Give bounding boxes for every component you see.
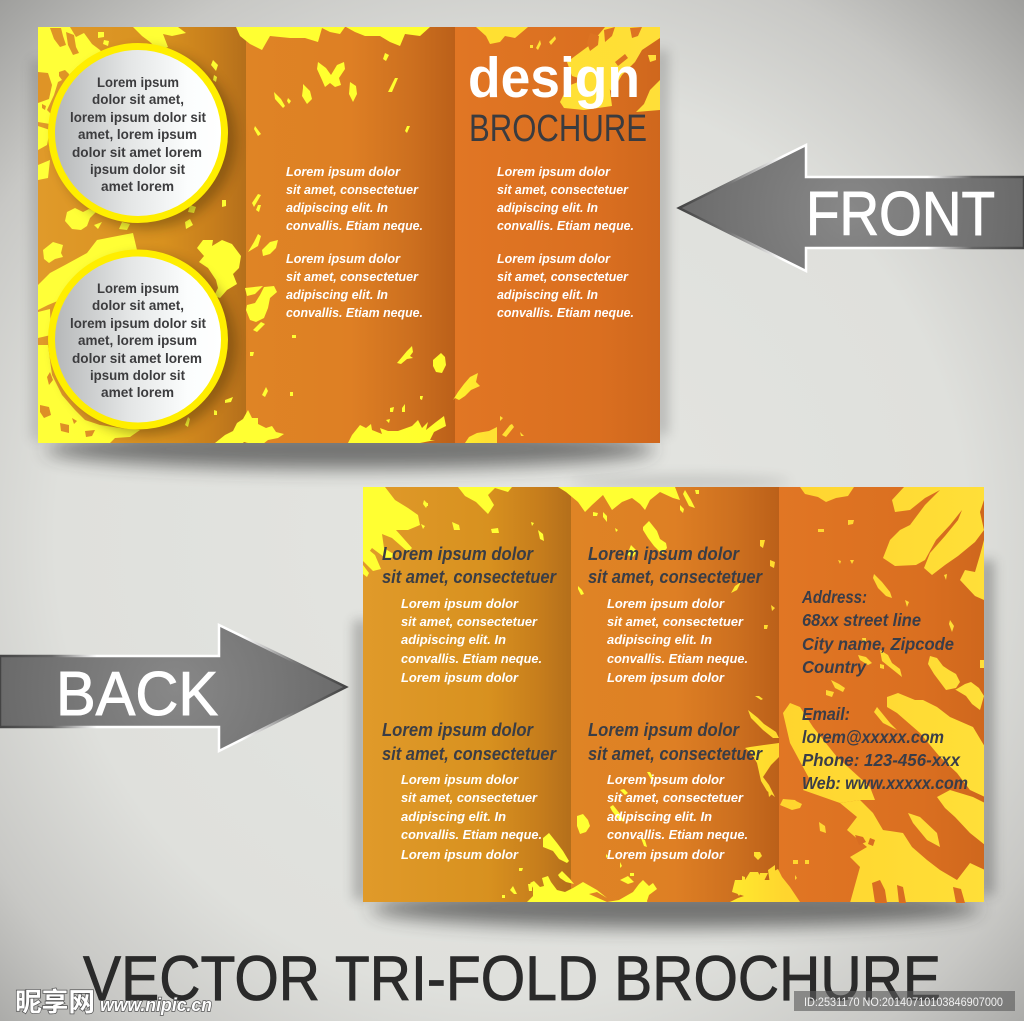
- front circle 1: Lorem ipsum: [97, 74, 179, 90]
- front paint splatter: [38, 27, 660, 444]
- back column 2 block 1: sit amet, consectetuer: [607, 614, 744, 629]
- back column 2 block 2: convallis. Etiam neque.: [607, 827, 748, 842]
- back brochure: [363, 487, 985, 913]
- watermark logo: 昵享网: [15, 987, 95, 1017]
- front brochure shadow: [32, 50, 668, 469]
- back brochure shadow: [354, 475, 994, 928]
- front cover heading: BROCHURE: [469, 108, 647, 150]
- back contact details: Country: [802, 657, 867, 677]
- watermark logo: www.nipic.cn: [100, 995, 212, 1015]
- front middle column text: convallis. Etiam neque.: [286, 218, 423, 233]
- back contact details: Phone: 123-456-xxx: [802, 750, 961, 770]
- front circle 1: ipsum dolor sit: [90, 161, 185, 177]
- back column 1 block 1: convallis. Etiam neque.: [401, 651, 542, 666]
- front circle 2: amet, lorem ipsum: [78, 332, 197, 348]
- back contact details: Address:: [801, 587, 867, 607]
- front circle 1: lorem ipsum dolor sit: [70, 109, 206, 125]
- back column 2 block 1: Lorem ipsum dolor: [607, 596, 725, 611]
- front right column text: convallis. Etiam neque.: [497, 218, 634, 233]
- back column 1 block 1: Lorem ipsum dolor: [401, 596, 519, 611]
- front cover heading: [468, 46, 647, 150]
- front cover heading: design: [468, 46, 640, 110]
- back column 2 block 2: Lorem ipsum dolor: [588, 720, 740, 740]
- back column 2 block 2: adipiscing elit. In: [607, 809, 712, 824]
- front arrow: FRONT: [806, 180, 995, 249]
- front right column text: sit amet, consectetuer: [497, 182, 629, 197]
- back column 2 block 1: [588, 544, 763, 685]
- main title: VECTOR TRI-FOLD BROCHURE: [83, 944, 941, 1014]
- front middle column text: adipiscing elit. In: [286, 287, 388, 302]
- watermark logo: [15, 987, 212, 1017]
- front circle 2: ipsum dolor sit: [90, 367, 185, 383]
- back contact details: [801, 587, 968, 793]
- back contact details: City name, Zipcode: [802, 634, 954, 654]
- front circle 1: amet, lorem ipsum: [78, 126, 197, 142]
- watermark id box: ID:2531170 NO:20140710103846907000: [804, 995, 1003, 1009]
- back column 1 block 2: sit amet, consectetuer: [401, 790, 538, 805]
- front middle column text: convallis. Etiam neque.: [286, 305, 423, 320]
- back arrow: [0, 625, 346, 751]
- back contact details: Email:: [802, 704, 850, 724]
- back column 1 block 1: Lorem ipsum dolor: [401, 670, 519, 685]
- back column 2 block 2: Lorem ipsum dolor: [607, 772, 725, 787]
- front circle 2: Lorem ipsum: [97, 280, 179, 296]
- back column 1 block 2: convallis. Etiam neque.: [401, 827, 542, 842]
- front circle 1: amet lorem: [101, 178, 174, 194]
- front circle 1: [48, 43, 236, 229]
- front middle column text: adipiscing elit. In: [286, 200, 388, 215]
- back contact details: Web: www.xxxxx.com: [802, 773, 968, 793]
- back column 2 block 2: sit amet, consectetuer: [588, 744, 763, 764]
- back column 1 block 2: sit amet, consectetuer: [382, 744, 557, 764]
- back column 1 block 2: Lorem ipsum dolor: [382, 720, 534, 740]
- back column 2 block 2: sit amet, consectetuer: [607, 790, 744, 805]
- back column 1 block 1: sit amet, consectetuer: [382, 567, 557, 587]
- front circle 1: dolor sit amet lorem: [72, 144, 202, 160]
- back column 2 block 1: Lorem ipsum dolor: [607, 670, 725, 685]
- front brochure: [38, 27, 660, 444]
- front circle 2: dolor sit amet lorem: [72, 350, 202, 366]
- front splatter holes: [38, 27, 642, 437]
- front right column text: adipiscing elit. In: [497, 200, 598, 215]
- back column 2 block 1: sit amet, consectetuer: [588, 567, 763, 587]
- back column 2 block 1: convallis. Etiam neque.: [607, 651, 748, 666]
- front middle column text: [286, 164, 423, 320]
- front circle 2: lorem ipsum dolor sit: [70, 315, 206, 331]
- front right column text: Lorem ipsum dolor: [497, 251, 611, 266]
- back column 1 block 2: adipiscing elit. In: [401, 809, 506, 824]
- back column 1 block 2: Lorem ipsum dolor: [401, 772, 519, 787]
- back column 1 block 1: Lorem ipsum dolor: [382, 544, 534, 564]
- back panels: [363, 487, 984, 902]
- front middle column text: Lorem ipsum dolor: [286, 164, 401, 179]
- front circle 2: dolor sit amet,: [92, 297, 184, 313]
- back column 2 block 2: [588, 720, 763, 862]
- back column 2 block 2: Lorem ipsum dolor: [607, 847, 725, 862]
- back column 1 block 1: sit amet, consectetuer: [401, 614, 538, 629]
- watermark id box: [794, 991, 1015, 1011]
- back contact details: 68xx street line: [802, 610, 921, 630]
- back column 2 block 1: adipiscing elit. In: [607, 632, 712, 647]
- front circle 2: amet lorem: [101, 384, 174, 400]
- back column 1 block 1: [382, 544, 557, 685]
- front right column text: convallis. Etiam neque.: [497, 305, 634, 320]
- front middle column text: sit amet, consectetuer: [286, 182, 419, 197]
- front circle 1: dolor sit amet,: [92, 91, 184, 107]
- front arrow: [679, 145, 1024, 271]
- front right column text: sit amet, consectetuer: [497, 269, 629, 284]
- front right column text: [497, 164, 634, 320]
- back contact details: lorem@xxxxx.com: [802, 727, 944, 747]
- back paint splatter: [363, 487, 985, 913]
- front panels: [38, 27, 660, 443]
- back arrow: BACK: [56, 660, 218, 729]
- back column 1 block 2: Lorem ipsum dolor: [401, 847, 519, 862]
- front circle 2: [48, 250, 236, 435]
- front right column text: adipiscing elit. In: [497, 287, 598, 302]
- front right column text: Lorem ipsum dolor: [497, 164, 611, 179]
- back splatter holes: [855, 835, 965, 903]
- front middle column text: sit amet, consectetuer: [286, 269, 419, 284]
- back column 1 block 2: [382, 720, 557, 862]
- back column 2 block 1: Lorem ipsum dolor: [588, 544, 740, 564]
- front middle column text: Lorem ipsum dolor: [286, 251, 401, 266]
- back column 1 block 1: adipiscing elit. In: [401, 632, 506, 647]
